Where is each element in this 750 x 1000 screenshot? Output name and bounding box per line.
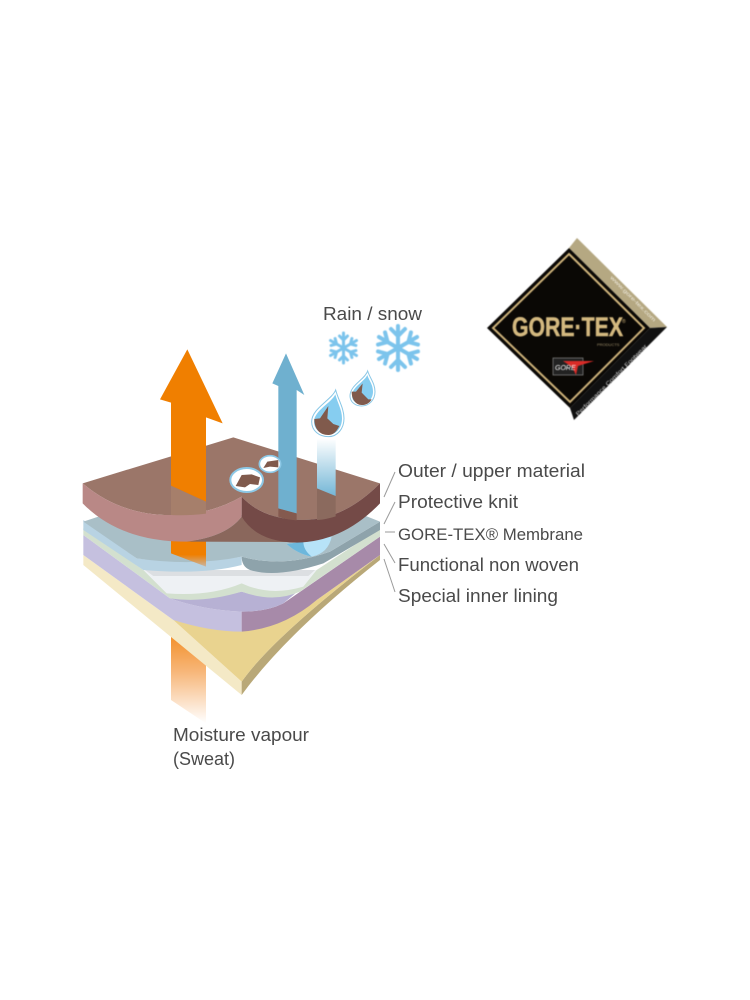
label: functional non woven: Functional non woven xyxy=(398,555,579,575)
small bubble on outer layer xyxy=(259,456,281,472)
moisture vapour column xyxy=(171,630,206,723)
label: outer upper material: Outer / upper material xyxy=(398,461,585,481)
logo: GORE-TEX diamond xyxy=(487,238,667,420)
icon: small snowflake xyxy=(329,333,358,363)
label: protective knit: Protective knit xyxy=(398,492,518,512)
logo wordmark: GORE·TEX xyxy=(512,312,623,342)
logo small gore mark: GORE xyxy=(555,365,576,372)
GORE-TEX membrane layer xyxy=(83,515,380,573)
icon: large snowflake xyxy=(375,326,421,370)
logo gold inner border xyxy=(493,254,644,402)
logo products line: PRODUCTS xyxy=(597,342,620,347)
functional non woven layer xyxy=(83,535,380,632)
leader lines xyxy=(384,472,395,592)
label: GORE-TEX membrane: GORE-TEX® Membrane xyxy=(398,525,583,544)
orange arrow: moisture vapour out xyxy=(160,349,223,502)
rain and snow label: Rain / snow xyxy=(323,304,423,324)
logo registered mark: ® xyxy=(622,318,626,325)
logo black band tagline: Performance Comfort Footwear xyxy=(575,344,649,417)
small water drop xyxy=(350,371,375,406)
large water drop xyxy=(312,390,344,437)
large bubble on outer layer xyxy=(230,468,263,492)
fabric layer diagram xyxy=(83,349,380,723)
ice column under drop xyxy=(317,438,336,496)
orange arrow below outer layer xyxy=(171,540,206,567)
logo tan band url: www.gore-tex.com xyxy=(609,275,657,323)
water drop under outer layer xyxy=(287,537,332,557)
logo black diamond xyxy=(487,248,650,408)
blue arrow xyxy=(272,353,304,513)
logo black band xyxy=(570,327,667,420)
protective knit layer xyxy=(83,528,380,600)
label: special inner lining: Special inner lining xyxy=(398,586,558,606)
label: sweat: (Sweat) xyxy=(173,749,235,769)
logo tan band xyxy=(569,238,667,328)
logo small gore mark xyxy=(553,358,594,375)
label: moisture vapour: Moisture vapour xyxy=(173,725,309,745)
outer upper material layer xyxy=(83,437,380,543)
special inner lining layer xyxy=(83,555,380,695)
